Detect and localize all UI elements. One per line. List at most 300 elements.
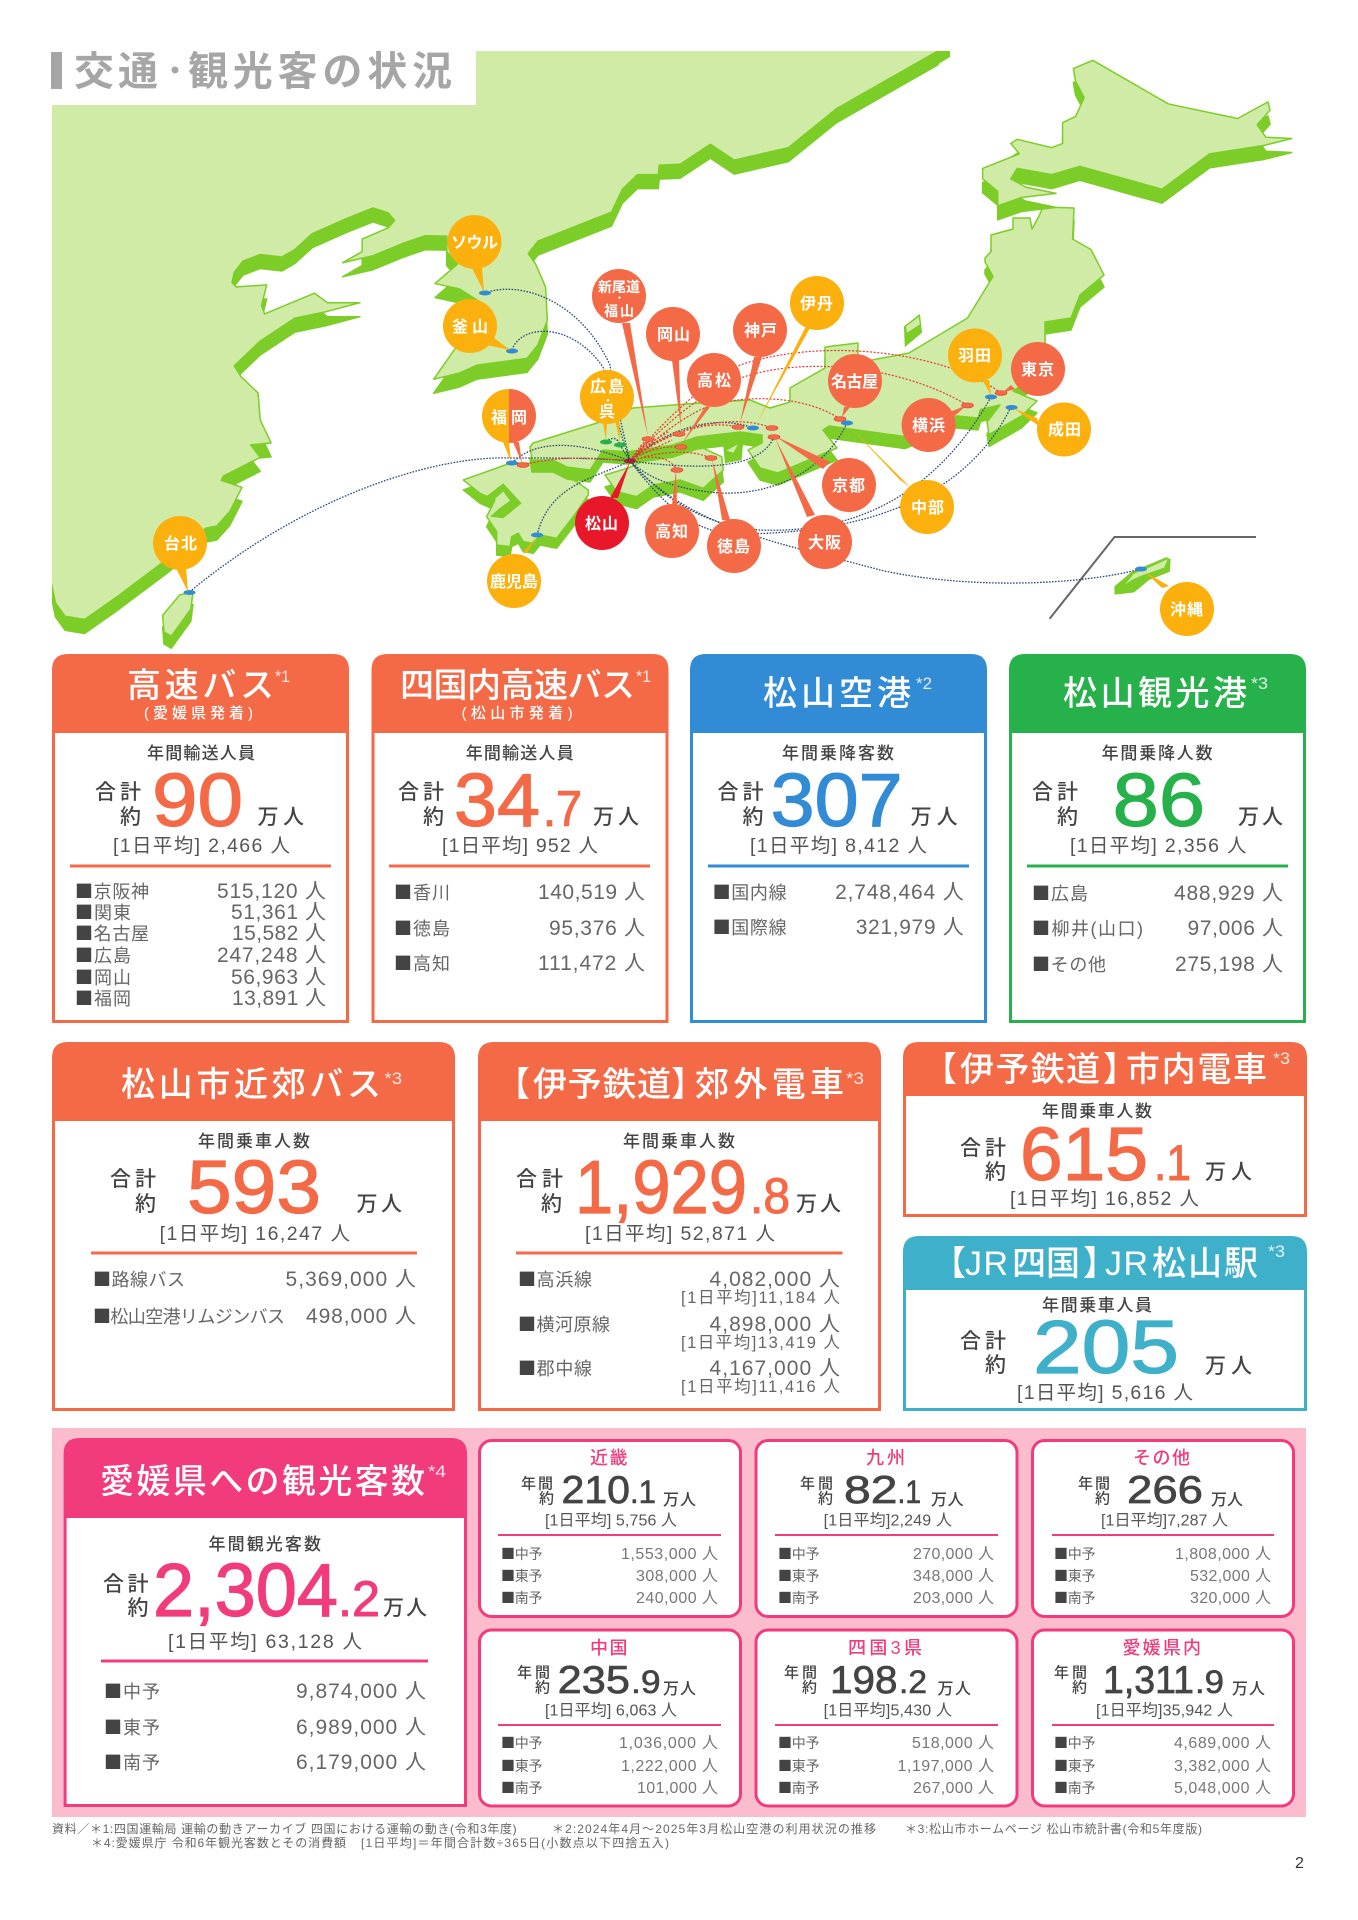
breakdown list: ■南予 [104, 1749, 160, 1775]
daily average: [1日平均] 952 人 [442, 835, 598, 857]
heading: 郊外電車 [695, 1066, 844, 1104]
heading: 】 [1103, 1051, 1137, 1089]
breakdown list: 348,000 人 [913, 1568, 994, 1585]
footnotes: [1日平均]＝年間合計数÷365日(小数点以下四捨五入) [361, 1835, 669, 1850]
breakdown list: ■中予 [778, 1544, 820, 1564]
total: 約 [120, 806, 141, 829]
total [110, 1145, 402, 1229]
total: 86 [1113, 758, 1205, 842]
daily average: [1日平均]2,249 人 [824, 1512, 952, 1530]
breakdown list: 2,748,464 人 [835, 881, 964, 904]
total: 年間 [1054, 1664, 1087, 1682]
total: 2,304 [153, 1548, 338, 1632]
total [1032, 758, 1283, 842]
heading: 伊予鉄道 [960, 1051, 1100, 1089]
pin: 高松 [681, 353, 741, 445]
heading: 伊予鉄道 [533, 1066, 671, 1104]
footnote mark: *3 [1268, 1242, 1285, 1261]
total: 約 [818, 1490, 833, 1508]
heading: 松山観光港 [1063, 675, 1247, 713]
daily average: [1日平均] 5,616 人 [1017, 1382, 1193, 1404]
breakdown list: ■南予 [1054, 1778, 1096, 1798]
region title: その他 [1133, 1448, 1190, 1468]
total: 万人 [356, 1193, 402, 1216]
panel: 松山市近郊バス [52, 1042, 455, 1411]
Okinawa inset frame line [1050, 537, 1256, 619]
total: 万人 [1232, 1681, 1265, 1698]
pin: 横浜: 横浜 [912, 416, 945, 435]
breakdown list: 95,376 人 [549, 917, 645, 940]
breakdown list: 320,000 人 [1190, 1590, 1271, 1607]
land: Honshu [530, 207, 1104, 473]
total: 年間 [784, 1664, 817, 1682]
panel: 松山空港 [690, 654, 987, 1023]
breakdown list: ■路線バス [93, 1266, 185, 1292]
total [1054, 1659, 1265, 1702]
breakdown list: 1,808,000 人 [1175, 1546, 1271, 1563]
total: 万人 [796, 1193, 841, 1216]
pin: 岡山: 岡山 [657, 326, 690, 344]
breakdown list: 4,898,000 人 [710, 1313, 840, 1336]
breakdown list: 4,689,000 人 [1174, 1735, 1271, 1752]
breakdown list: 1,222,000 人 [621, 1758, 718, 1775]
daily average: [1日平均] 2,466 人 [113, 835, 290, 857]
total: 合計 [718, 781, 764, 804]
total [521, 1469, 696, 1512]
total [718, 758, 958, 842]
total: .2 [338, 1571, 380, 1627]
land: Awaji [723, 442, 743, 463]
pin: 東京 [1002, 342, 1065, 396]
total: 約 [535, 1680, 550, 1696]
breakdown list: ■中予 [778, 1733, 820, 1753]
total: 約 [985, 1354, 1006, 1377]
breakdown list: 1,197,000 人 [898, 1758, 994, 1775]
total: 合計 [398, 781, 444, 804]
pin: 松山 [575, 462, 630, 550]
total: 合計 [110, 1168, 156, 1191]
heading: JR [965, 1245, 1008, 1283]
footnotes: 資料／＊1:四国運輸局 運輸の動きアーカイブ 四国における運輸の動き(令和3年度) [52, 1821, 517, 1836]
breakdown list [713, 879, 964, 940]
panel: 九州 [756, 1440, 1017, 1616]
total: .1 [898, 1474, 921, 1510]
daily average: [1日平均] 5,756 人 [545, 1512, 677, 1530]
route markers [184, 290, 1147, 595]
heading: 【 [932, 1245, 966, 1283]
heading: 】 [671, 1066, 705, 1104]
pin: 福岡: 福岡 [491, 409, 527, 427]
total: 約 [135, 1193, 156, 1216]
daily average: [1日平均] 16,852 人 [1010, 1188, 1199, 1210]
pin: 広島・呉: 呉 [599, 403, 615, 421]
breakdown list: ■中予 [1054, 1544, 1096, 1564]
panel: 四国内高速バス [372, 654, 668, 1023]
breakdown list: 15,582 人 [232, 922, 326, 945]
panel: 近畿 [480, 1440, 740, 1616]
pin: 台北: 台北 [164, 534, 197, 553]
pin: 新尾道・福山: ・ [615, 293, 624, 303]
total: 年間 [517, 1664, 550, 1682]
total: 約 [802, 1680, 817, 1696]
breakdown list: 4,082,000 人 [710, 1268, 840, 1291]
land: Taiwan [163, 593, 193, 636]
total [1078, 1469, 1243, 1512]
pin: 神戸 [733, 303, 787, 423]
total: 90 [152, 758, 243, 842]
total: 593 [187, 1145, 321, 1229]
pin: 鹿児島: 鹿児島 [490, 572, 538, 591]
total: 34 [454, 758, 540, 842]
subheading: (松山市発着) [462, 704, 573, 722]
pin: 釜山 [443, 299, 510, 353]
panel: 高速バス [52, 654, 349, 1023]
total [517, 1659, 696, 1702]
breakdown list: 4,167,000 人 [710, 1357, 840, 1380]
heading: 四国 [1012, 1245, 1080, 1283]
breakdown list [75, 878, 326, 1011]
pin: 新尾道・福山: 福山 [604, 303, 634, 319]
daily average: [1日平均] 2,356 人 [1070, 835, 1246, 857]
total: 年間 [800, 1476, 833, 1492]
breakdown list: ■高知 [394, 950, 450, 976]
region title: 中国 [590, 1638, 628, 1658]
breakdown list: 6,179,000 人 [296, 1751, 426, 1774]
total: 万人 [1205, 1355, 1252, 1378]
breakdown list: ■福岡 [75, 985, 131, 1011]
breakdown list: 515,120 人 [217, 880, 326, 903]
total: 205 [1033, 1305, 1179, 1389]
heading [496, 1066, 844, 1104]
total: 万人 [931, 1492, 964, 1509]
pin: 高知: 高知 [655, 522, 688, 541]
breakdown list: ■中予 [104, 1678, 160, 1704]
pin: 東京: 東京 [1021, 360, 1054, 379]
total: 合計 [960, 1137, 1006, 1160]
pin: 広島・呉 [580, 370, 634, 443]
total: 万人 [1211, 1492, 1243, 1509]
breakdown list: 3,382,000 人 [1174, 1758, 1271, 1775]
title: 交通 [74, 50, 158, 94]
region title: 九州 [866, 1448, 905, 1468]
heading: 【 [923, 1051, 957, 1089]
pin: 伊丹 [757, 276, 844, 423]
pin: 羽田 [948, 328, 1002, 395]
breakdown list: 488,929 人 [1174, 882, 1283, 905]
breakdown list: 101,000 人 [637, 1780, 718, 1797]
label: 年間乗車人数 [1042, 1102, 1152, 1121]
footnotes: ＊4:愛媛県庁 令和6年観光客数とその消費額 [91, 1835, 346, 1850]
total: .7 [543, 781, 582, 837]
breakdown list: ■横河原線 [518, 1311, 610, 1337]
pin: 羽田: 羽田 [958, 348, 991, 365]
breakdown list: 498,000 人 [306, 1305, 416, 1328]
panel: 郊外電車 [478, 1042, 881, 1411]
breakdown list [501, 1544, 718, 1608]
label: 年間乗降客数 [782, 744, 894, 763]
pin: 成田 [1013, 402, 1091, 456]
total: 約 [1072, 1680, 1087, 1696]
heading: 】 [1083, 1245, 1117, 1283]
breakdown list [1032, 880, 1283, 977]
total: 266 [1127, 1469, 1203, 1512]
breakdown list: ■東予 [1054, 1566, 1096, 1586]
heading: 四国内高速バス [400, 667, 635, 705]
breakdown list: ■東予 [778, 1756, 820, 1776]
total: 約 [1095, 1490, 1110, 1508]
pin: 釜山: 釜山 [452, 318, 488, 336]
total [960, 1112, 1252, 1196]
breakdown list: ■東予 [104, 1714, 160, 1740]
subheading: (愛媛県発着) [144, 705, 253, 722]
pin: 徳島 [707, 459, 761, 573]
pin: ソウル: ソウル [451, 234, 498, 252]
pin: 徳島: 徳島 [717, 537, 750, 556]
panel: 松山観光港 [1009, 654, 1306, 1023]
pin: 鹿児島 [487, 537, 541, 608]
pin: 高知 [645, 470, 699, 558]
breakdown list: 51,361 人 [231, 901, 326, 924]
heading: JR [1105, 1245, 1148, 1283]
breakdown list [778, 1733, 994, 1798]
total: .9 [1195, 1664, 1224, 1700]
footnote mark: *3 [384, 1069, 402, 1088]
pin: 新尾道・福山 [592, 269, 648, 437]
breakdown list: ■中予 [501, 1544, 542, 1564]
breakdown list: 247,248 人 [217, 944, 326, 967]
breakdown list [778, 1544, 994, 1608]
title: 観光客の状況 [188, 50, 452, 94]
air routes (blue dotted) [190, 289, 1141, 592]
breakdown list: ■郡中線 [518, 1355, 592, 1381]
total: 210 [562, 1469, 630, 1512]
page number: 2 [1295, 1855, 1304, 1872]
heading: 愛媛県への観光客数 [100, 1463, 425, 1501]
total: .9 [631, 1664, 661, 1700]
panel: 愛媛県への観光客数 [64, 1438, 467, 1807]
footnote mark: *3 [846, 1069, 864, 1088]
total [103, 1548, 427, 1632]
heading: 松山空港 [763, 675, 911, 713]
panel: 愛媛県内 [1032, 1630, 1294, 1806]
pin: 名古屋 [828, 354, 882, 417]
breakdown list: [1日平均]11,416 人 [681, 1377, 840, 1396]
total: 合計 [960, 1330, 1006, 1353]
total: 合計 [516, 1168, 563, 1191]
total: .2 [899, 1664, 927, 1700]
heading: 市内電車 [1126, 1051, 1267, 1089]
heading: 松山駅 [1152, 1245, 1258, 1283]
white title background [0, 0, 476, 105]
breakdown list: 1,553,000 人 [621, 1546, 718, 1563]
total: 82 [844, 1469, 898, 1512]
breakdown list: ■南予 [778, 1588, 820, 1608]
region title: 近畿 [590, 1448, 628, 1468]
total: 万人 [911, 806, 958, 829]
breakdown list: ■徳島 [394, 915, 450, 941]
total: 約 [128, 1597, 148, 1620]
breakdown list: ■中予 [1054, 1733, 1096, 1753]
footnote mark: *3 [1273, 1049, 1290, 1068]
breakdown list: ■広島 [75, 942, 131, 968]
panel: 中国 [480, 1630, 740, 1806]
breakdown list: 518,000 人 [912, 1735, 994, 1752]
total [398, 758, 639, 842]
footnotes [52, 1821, 1202, 1850]
breakdown list: 321,979 人 [856, 916, 964, 939]
total: 万人 [1238, 806, 1283, 829]
total: 約 [1057, 806, 1078, 829]
land: Sado and Okinawa [904, 314, 1171, 595]
breakdown list: 267,000 人 [913, 1780, 994, 1797]
breakdown list [394, 879, 645, 976]
total: 約 [541, 1193, 562, 1216]
breakdown list: 240,000 人 [636, 1590, 718, 1607]
heading: 高速バス [127, 667, 274, 705]
region title: 愛媛県内 [1122, 1638, 1201, 1658]
breakdown list [1054, 1544, 1271, 1608]
heading: 松山市近郊バス [121, 1066, 381, 1104]
label: 年間乗車人員 [1042, 1296, 1152, 1315]
daily average: [1日平均]7,287 人 [1101, 1512, 1228, 1530]
breakdown list: 5,048,000 人 [1174, 1780, 1271, 1797]
breakdown list [93, 1266, 416, 1329]
title [51, 50, 452, 94]
daily average: [1日平均]5,430 人 [824, 1702, 952, 1720]
breakdown list: ■国内線 [713, 879, 787, 905]
total: 万人 [593, 806, 639, 829]
breakdown list: ■高浜線 [518, 1266, 592, 1292]
daily average: [1日平均] 8,412 人 [750, 835, 927, 857]
breakdown list: ■関東 [75, 899, 131, 925]
pin: 大阪 [775, 438, 852, 569]
breakdown list: 532,000 人 [1190, 1568, 1271, 1585]
pin: 台北 [153, 516, 207, 592]
total: 合計 [1032, 781, 1078, 804]
breakdown list: ■東予 [501, 1756, 542, 1776]
footnote mark: *1 [636, 667, 651, 686]
panel: 四国3県 [756, 1630, 1017, 1806]
total: 約 [423, 806, 444, 829]
label: 年間輸送人員 [147, 744, 255, 763]
breakdown list: ■柳井(山口) [1032, 915, 1143, 941]
footnotes: ＊2:2024年4月～2025年3月松山空港の利用状況の推移 [552, 1821, 876, 1836]
breakdown list: ■南予 [501, 1778, 542, 1798]
breakdown list: ■南予 [778, 1778, 820, 1798]
footnote mark: *2 [916, 674, 932, 693]
breakdown list: 140,519 人 [538, 881, 645, 904]
heading [932, 1245, 1258, 1283]
breakdown list: ■松山空港リムジンバス [93, 1303, 285, 1329]
heading: 【 [496, 1066, 530, 1104]
pin: 名古屋: 名古屋 [831, 373, 878, 391]
pin: 沖縄: 沖縄 [1170, 601, 1203, 619]
breakdown list: ■南予 [1054, 1588, 1096, 1608]
breakdown list: [1日平均]11,184 人 [681, 1288, 840, 1307]
total: 307 [771, 758, 903, 842]
footnote mark: *4 [428, 1462, 446, 1481]
total: 万人 [258, 806, 304, 829]
breakdown list: ■東予 [778, 1566, 820, 1586]
land: Shikoku [605, 447, 723, 497]
footnote mark: *3 [1251, 674, 1268, 693]
panel: JR松山駅 [903, 1236, 1307, 1411]
total: .1 [630, 1474, 656, 1510]
pin: 沖縄 [1145, 572, 1214, 636]
breakdown list: 9,874,000 人 [296, 1680, 426, 1703]
breakdown list: 270,000 人 [913, 1546, 994, 1563]
daily average: [1日平均] 63,128 人 [168, 1631, 362, 1653]
total: .1 [1154, 1135, 1191, 1191]
breakdown list [1054, 1733, 1271, 1798]
daily average: [1日平均] 6,063 人 [545, 1702, 677, 1720]
total: 万人 [663, 1681, 696, 1698]
pin: 伊丹: 伊丹 [800, 295, 833, 313]
total: 万人 [663, 1492, 696, 1509]
breakdown list: [1日平均]13,419 人 [681, 1333, 840, 1352]
total: 万人 [383, 1597, 427, 1620]
breakdown list: ■東予 [1054, 1756, 1096, 1776]
breakdown list: 13,891 人 [232, 987, 326, 1010]
label: 年間乗車人数 [198, 1132, 310, 1151]
pin: 広島・呉: ・ [603, 396, 613, 407]
pin: 中部 [848, 425, 954, 534]
total [800, 1469, 964, 1512]
breakdown list: ■京阪神 [75, 878, 149, 904]
pin: 中部: 中部 [911, 499, 944, 517]
total: 235 [558, 1659, 630, 1702]
total: 万人 [1205, 1161, 1252, 1184]
total: 約 [742, 806, 764, 829]
breakdown list: ■国際線 [713, 914, 787, 940]
total [95, 758, 304, 842]
breakdown list: ■その他 [1032, 951, 1106, 977]
breakdown list: 203,000 人 [913, 1590, 994, 1607]
panel: その他 [1032, 1440, 1294, 1616]
daily average: [1日平均] 52,871 人 [585, 1223, 775, 1245]
total: 約 [985, 1161, 1006, 1184]
land: Hokkaido [983, 60, 1292, 206]
total [516, 1145, 841, 1229]
daily average: [1日平均] 16,247 人 [160, 1223, 350, 1245]
breakdown list: ■香川 [394, 879, 450, 905]
total: 1,929 [575, 1145, 747, 1229]
breakdown list: ■広島 [1032, 880, 1088, 906]
pin: 大阪: 大阪 [808, 534, 841, 552]
total [960, 1305, 1252, 1389]
region title: 四国3県 [848, 1638, 922, 1658]
breakdown list [518, 1266, 840, 1396]
footnote mark: *1 [275, 667, 290, 686]
breakdown list: ■岡山 [75, 964, 131, 990]
footnotes: ＊3:松山市ホームページ 松山市統計書(令和5年度版) [905, 1821, 1202, 1836]
label: 年間観光客数 [208, 1535, 321, 1554]
total: .8 [750, 1168, 790, 1224]
pin: 福岡 [482, 389, 536, 463]
breakdown list: 5,369,000 人 [286, 1268, 416, 1291]
map of Japan and East Asia [0, 0, 1292, 636]
total: 615 [1020, 1112, 1148, 1196]
pin: 京都: 京都 [832, 477, 865, 495]
bus and sea routes (red dotted) [523, 350, 1001, 470]
total: 年間 [1078, 1476, 1110, 1492]
total: 1,311 [1103, 1659, 1194, 1702]
breakdown list [501, 1733, 718, 1798]
breakdown list: 308,000 人 [636, 1568, 718, 1585]
breakdown list: 97,006 人 [1188, 917, 1283, 940]
total: 198 [830, 1659, 898, 1702]
land: Asian mainland [26, 25, 950, 620]
